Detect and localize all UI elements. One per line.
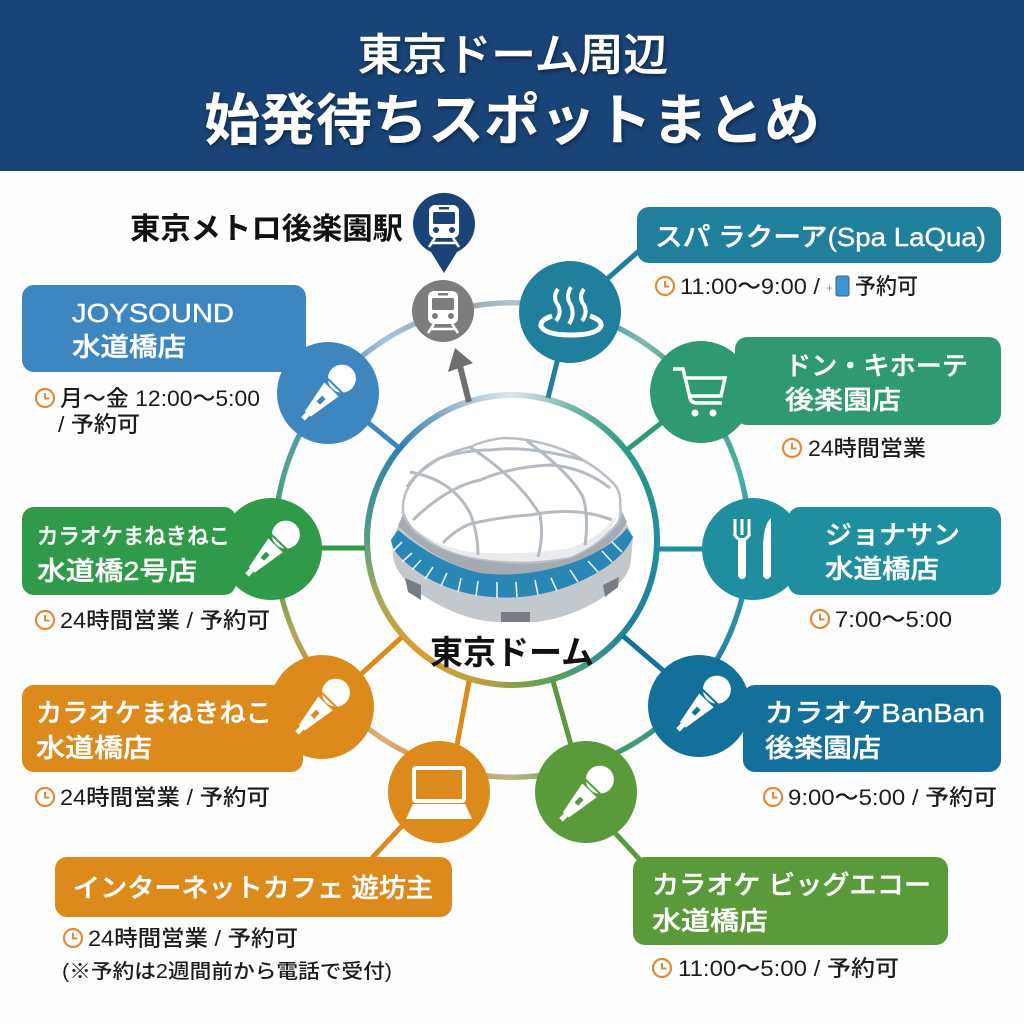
name: 水道橋2号店 [37,556,197,586]
name [652,870,931,936]
icon: microphone [270,655,374,759]
icon: fork and knife [702,498,804,600]
name [785,351,968,415]
icon: cart [650,341,752,443]
name: 水道橋店 [652,906,768,936]
name: カラオケBanBan [765,698,985,728]
name: 後楽園店 [765,733,881,763]
hours [62,926,392,983]
name: 水道橋店 [36,733,152,763]
panel: don quijote [628,337,1001,461]
spoke [659,546,705,552]
name [825,520,960,584]
panel: internet cafe [55,681,490,983]
spoke [360,637,402,675]
icon: microphone [535,741,637,843]
hours: 24時間営業 / 予約可 [60,608,270,633]
label box [743,685,1001,772]
hours: (※予約は2週間前から電話で受付) [62,960,392,983]
hours: 9:00〜5:00 / 予約可 [788,785,997,810]
hours [36,386,260,437]
icon: microphone [648,655,750,757]
panel: JOYSOUND [22,285,398,447]
title line 2: 始発待ちスポットまとめ [204,89,820,152]
title line 1: 東京ドーム周辺 [358,31,668,80]
icon: hot spring [519,261,621,363]
label box [22,685,303,772]
panel: karaoke banban [623,636,1001,810]
hours: 月〜金 12:00〜5:00 [60,386,260,411]
panel: karaoke manekineko [22,637,402,810]
name: ジョナサン [825,520,960,550]
label box [55,857,452,917]
icon: grey train node [412,280,474,342]
panel: jonathan [659,498,1001,632]
spokes [553,681,642,862]
icon: microphone [277,342,379,444]
tokyo dome [391,438,633,622]
spokes [372,681,469,858]
hours: / 予約可 [58,412,140,437]
label box [633,857,948,945]
label box [637,207,1001,263]
icon: station pin [413,193,475,273]
name [72,298,234,362]
outer ring [272,300,752,780]
hours: 11:00〜5:00 / 予約可 [678,956,899,981]
label box [22,507,236,595]
label box [735,337,1001,425]
dome label: 東京ドーム [430,634,594,671]
title [204,31,820,152]
header band [0,0,1024,171]
name: カラオケ ビッグエコー [652,870,931,900]
hours: + [826,281,833,295]
name [36,698,272,763]
name: インターネットカフェ 遊坊主 [73,873,433,903]
name [765,698,985,763]
icon: laptop [388,741,490,843]
inner ring [364,392,660,688]
name: スパ ラクーア(Spa LaQua) [655,222,986,252]
name: 水道橋店 [825,554,939,584]
name: 後楽園店 [785,385,901,415]
arrow: dome to station [448,348,473,402]
panel: karaoke manekineko 2 [22,498,365,633]
label box [788,507,1001,595]
hours: 24時間営業 / 予約可 [88,926,298,951]
hours: 7:00〜5:00 [835,607,952,632]
hours: 予約可 [855,274,918,299]
name: 水道橋店 [72,332,186,362]
spoke [360,416,398,447]
spoke [623,636,665,672]
hours: 11:00〜9:00 / [680,274,821,299]
station label: 東京メトロ後楽園駅 [130,213,403,246]
inner disc [370,398,654,682]
hours [656,274,918,299]
name: カラオケまねきねこ [36,698,272,728]
name [37,524,230,586]
panel: karaoke big echo [535,681,948,981]
hours: 24時間営業 / 予約可 [60,785,270,810]
panel: spa laqua [519,207,1001,398]
icon: microphone [220,498,322,600]
spokes [548,250,640,398]
name: JOYSOUND [72,298,234,328]
name: ドン・キホーテ [785,351,968,381]
label box [22,285,306,372]
name: カラオケまねきねこ [37,524,230,549]
spoke [315,546,365,550]
hours: 24時間営業 [808,436,926,461]
spoke [628,420,665,449]
